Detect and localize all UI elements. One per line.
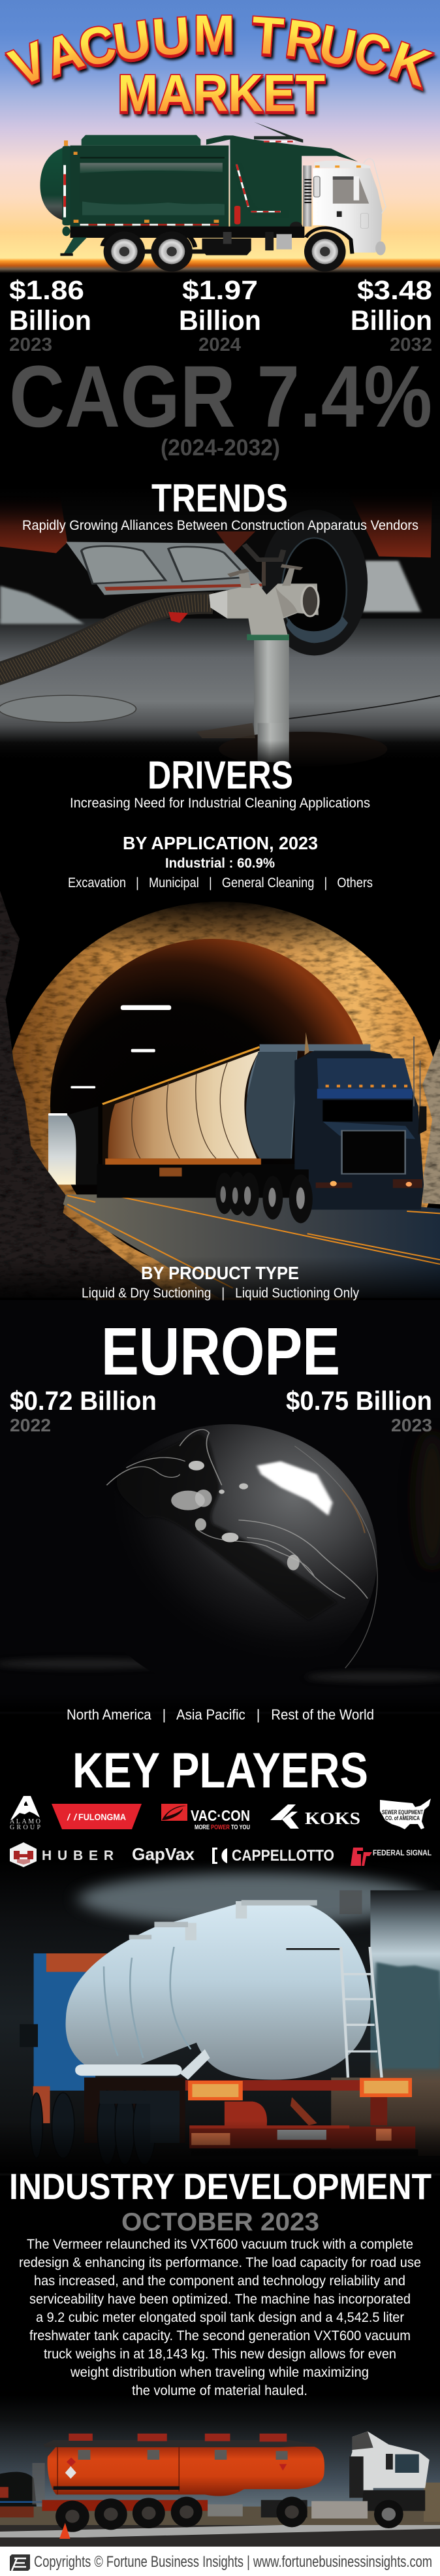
tunnel ring [0,902,440,1346]
application share: Industrial : 60.9% [165,856,275,871]
illustration: green vacuum truck [40,122,386,272]
side pipe [75,2064,182,2076]
tractor cab [294,1051,424,1210]
photo: orange tanker side view [0,2396,440,2547]
globe continent mass [117,1433,337,1620]
title: Vacuum Truck Market: U [315,13,361,78]
stat: Europe 2023 [286,1386,432,1435]
paragraph: industry development: serviceability have been optimized. The machine has incorporated [29,2292,411,2307]
paragraph: industry development: weight distribution when traveling while maximizing [70,2365,369,2380]
title: Vacuum Truck Market: R [282,8,326,71]
logo: Federal Signal: FEDERAL SIGNAL [373,1848,432,1857]
logo: Federal Signal [351,1848,432,1866]
globe rim [294,1446,377,1668]
logo: Alamo Group: ALAMO [10,1818,40,1825]
road [63,1194,440,1298]
date: October 2023: OCTOBER 2023 [121,2208,319,2236]
paragraph: industry development: the volume of material hauled. [132,2383,307,2398]
product types: Liquid & Dry Suctioning | Liquid Suctioning Only [82,1286,359,1301]
stat: 2023 value [9,275,91,355]
title: Vacuum Truck Market: MARKET [118,64,325,122]
stat: 2032 value: $3.48 [357,275,432,305]
frame [185,2080,410,2091]
sunset sky background [0,0,440,273]
chassis [70,227,304,238]
heading: drivers: DRIVERS [148,753,293,797]
stat: 2023 value: 2023 [9,334,52,355]
stat: 2032 value: Billion [351,305,432,336]
paragraph: industry development: a 9.2 cubic meter elongated spoil tank design and a 4,542.5 liter [36,2310,404,2325]
logo: Cappellotto: CAPPELLOTTO [232,1847,334,1865]
paragraph: industry development: has increased, and the component and technology reliability and [34,2274,405,2289]
logo: Vac-Con: VAC·CON [191,1807,250,1824]
logo: Alamo Group: GROUP [10,1824,40,1831]
logo: Alamo Group [10,1796,40,1831]
footer bar [0,2547,440,2576]
truck wheels [215,1171,313,1223]
globe swirls [106,1429,368,1599]
manhole [0,695,136,723]
tunnel inside [50,939,374,1269]
exhaust [303,165,311,227]
stat: Europe 2022: $0.72 Billion [10,1386,157,1416]
tunnel lights [48,1005,171,1116]
title: Vacuum Truck Market: U [110,8,154,72]
title: Vacuum Truck Market: C [348,20,396,86]
trends text: Rapidly Growing Alliances Between Construction Apparatus Vendors [22,518,418,533]
heading: trends: TRENDS [151,476,288,520]
photo: tanker truck in tunnel [0,890,440,1346]
stat: 2024 value: $1.97 [182,275,258,305]
rock walls [0,890,174,1298]
logo: Fulongma: // [67,1812,78,1822]
logo: Koks: KOKS [305,1809,360,1828]
valve body [209,583,319,635]
title: Vacuum Truck Market: V [2,30,55,97]
globe highlight [257,1461,332,1516]
CAGR period: (2024-2032) [161,435,280,461]
tanker body [32,2434,325,2517]
tractor [261,2432,430,2519]
tractor cab [20,1953,108,2123]
truck tyre [261,510,368,655]
heading: key players: KEY PLAYERS [72,1743,368,1799]
logo: Fulongma [52,1804,142,1829]
stat: 2024 value: Billion [179,305,261,336]
title: Vacuum Truck Market: C [73,13,121,78]
title: Vacuum Truck Market: M [193,4,235,63]
heading: by product type: BY PRODUCT TYPE [141,1263,299,1283]
logo: Fulongma: FULONGMA [78,1812,126,1822]
paragraph: industry development [19,2237,421,2398]
stat: Europe 2023: 2023 [391,1415,432,1435]
wheels [104,231,346,272]
trailer end wall [247,1044,370,1158]
lights row [326,1082,408,1090]
stat: 2024 value: 2024 [198,334,241,355]
title: Vacuum Truck Market: A [37,20,90,87]
road surface details [0,695,440,769]
logo: Vac-Con: MORE POWER TO YOU [195,1824,250,1831]
globe bottom horizon fade [0,1693,440,1712]
stat: 2024 value [179,275,261,355]
access door [66,542,262,595]
application segments: Excavation | Municipal | General Cleaning | Others [68,875,373,890]
hose [0,603,213,676]
paragraph: industry development: freshwater tank capacity. The second generation VXT600 vacuum [29,2328,411,2343]
wheels [30,2091,156,2164]
stat: 2032 value [351,275,432,355]
heading: by application: BY APPLICATION, 2023 [123,833,318,853]
title: Vacuum Truck Market: K [383,30,438,98]
open hole [219,732,387,766]
photo: hose and valve on truck [0,488,440,760]
stat: Europe 2022: 2022 [10,1415,51,1435]
title: Vacuum Truck Market [2,4,438,122]
other regions: North America | Asia Pacific | Rest of the World [67,1706,374,1723]
tanker trailer [97,1164,309,1198]
fade at top of hose photo [0,487,440,526]
logo: Sewer Equipment Co. of America: SEWER EQUIPMENT [382,1809,423,1816]
photo: dark globe [0,1300,440,1714]
footer logo [10,2554,30,2571]
heading: Europe: EUROPE [101,1314,340,1389]
logo: Sewer Equipment Co. of America: CO. of AMERICA [385,1815,420,1821]
wheels [55,2497,403,2532]
stat: 2023 value: Billion [9,305,91,336]
photo: white tanker rear view [0,1860,440,2176]
logo: Sewer Equipment Co. of America [380,1799,431,1829]
title: Vacuum Truck Market: U [150,6,192,67]
logo: GapVax: GapVax [132,1844,195,1864]
arm and front hopper [206,135,358,227]
white cab [313,168,382,253]
valve pipe [254,638,289,758]
stat: 2023 value: $1.86 [9,275,84,305]
logo: Huber [10,1842,114,1867]
logo: Huber: HUBER [42,1848,114,1863]
stat: 2032 value: 2032 [390,334,432,355]
logo: Vac-Con [161,1804,250,1831]
logo: Koks [270,1804,360,1829]
paragraph: industry development: truck weighs in at 18,143 kg. This new design allows for even [44,2347,396,2362]
title: Vacuum Truck Market: T [249,5,286,66]
drivers text: Increasing Need for Industrial Cleaning Applications [70,796,370,811]
stat: Europe 2023: $0.75 Billion [286,1386,432,1416]
paragraph: industry development: The Vermeer relaunched its VXT600 vacuum truck with a complete [27,2237,413,2252]
paragraph: industry development: redesign & enhancing its performance. The load capacity for road use [19,2255,421,2270]
white tank [66,1901,370,2079]
stat: Europe 2022 [10,1386,157,1435]
